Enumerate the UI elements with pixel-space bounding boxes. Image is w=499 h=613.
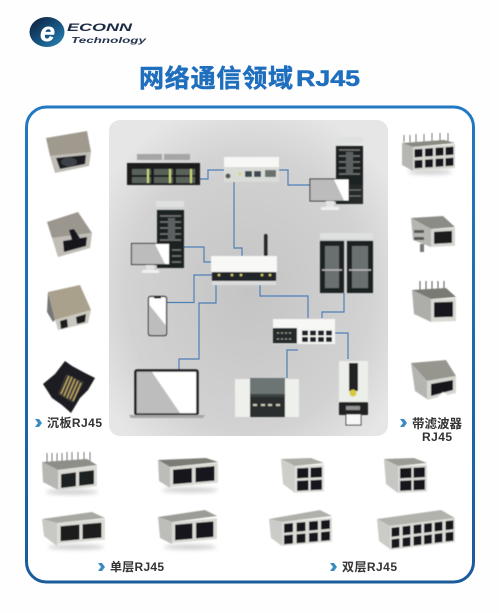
panel: network diagram [109, 120, 388, 436]
connector: single 3 [42, 512, 105, 550]
logo: Technology [71, 36, 147, 45]
connector: single 1 [42, 452, 98, 494]
label: sink RJ45: 沉板RJ45 [47, 415, 102, 430]
title: RJ45 [296, 66, 360, 91]
device: smartphone [148, 296, 166, 336]
connector: sink 3 [47, 285, 91, 330]
device: small router [224, 157, 279, 182]
logo [30, 17, 147, 47]
connector: filter 4 [411, 360, 456, 400]
device: laptop [129, 370, 205, 418]
connection lines [167, 170, 348, 378]
label: dual-layer RJ45: 双层RJ45 [342, 560, 397, 574]
device: rack server [127, 154, 200, 185]
connector: dual 2 [384, 458, 427, 493]
logo: e [40, 17, 55, 47]
connector: dual 1 [281, 458, 324, 493]
device: twin towers [320, 233, 373, 293]
label: single-layer RJ45: 单层RJ45 [110, 559, 164, 574]
label: filter RJ45: RJ45 [422, 430, 452, 444]
connector: filter 3 [412, 281, 456, 322]
label: filter RJ45: 带滤波器 [412, 416, 462, 431]
device: tower and monitor left [132, 201, 184, 273]
connector: dual 3 [269, 510, 332, 546]
device: box gateway [235, 378, 299, 417]
connector: filter 2 [411, 216, 455, 252]
connector: dual 4 [377, 510, 455, 550]
device: central wireless router [211, 234, 277, 285]
title: 网络通信领域 [139, 65, 293, 93]
device: network switch [273, 319, 335, 344]
logo: ECONN [67, 22, 134, 34]
connector: single 2 [158, 458, 218, 492]
connector: sink 4 [43, 361, 95, 413]
title [139, 65, 360, 93]
device: USB dongle [339, 361, 368, 425]
label: filter RJ45 [400, 416, 462, 444]
connector: filter 1 [402, 133, 455, 174]
connector: sink 1 [46, 131, 91, 173]
connector: sink 2 [47, 212, 92, 257]
connector: single 4 [158, 510, 217, 550]
device: tower and monitor top right [310, 137, 363, 210]
outer frame [26, 107, 474, 582]
